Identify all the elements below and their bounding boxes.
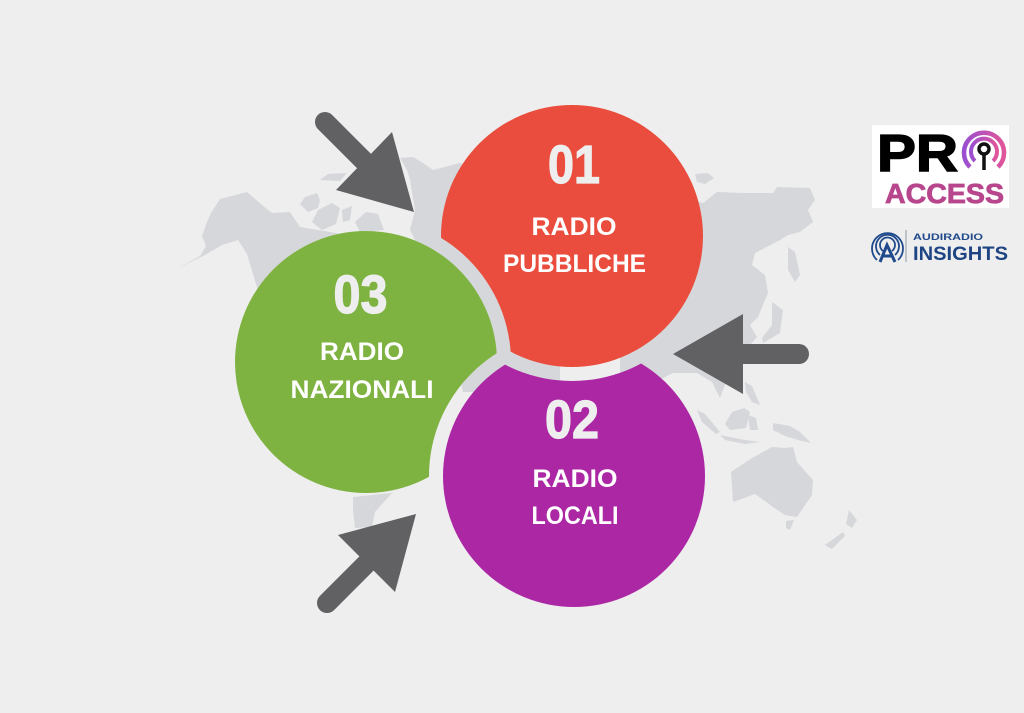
number 03: 03	[334, 265, 388, 325]
logo text: PR: PR	[877, 125, 958, 183]
label: radio pubbliche: RADIO	[532, 213, 616, 241]
logo text: ACCESS: ACCESS	[885, 178, 1004, 209]
circle: radio nazionali	[235, 231, 497, 493]
number 02: 02	[545, 390, 599, 450]
world map	[178, 157, 857, 549]
logo: pro access	[872, 125, 1009, 209]
arrow: top left	[325, 122, 414, 212]
arrow: right	[673, 314, 799, 394]
label: nazionali second line: NAZIONALI	[290, 376, 434, 404]
logo text: audiradio: AUDIRADIO	[913, 232, 983, 243]
logo icon: podcast rings	[964, 133, 1004, 170]
label: pubbliche second line: PUBBLICHE	[503, 250, 646, 278]
circle: radio pubbliche	[441, 105, 703, 367]
label: locali second line: LOCALI	[532, 502, 618, 530]
label: radio locali: RADIO	[532, 465, 618, 493]
arrow: bottom left	[327, 514, 416, 603]
circle: radio locali	[443, 345, 705, 607]
logo icon: antenna rings	[872, 233, 903, 262]
number 01: 01	[548, 135, 600, 195]
label: radio nazionali: RADIO	[320, 338, 404, 366]
logo: audiradio insights	[872, 230, 1008, 265]
logo text: insights: INSIGHTS	[913, 243, 1008, 265]
